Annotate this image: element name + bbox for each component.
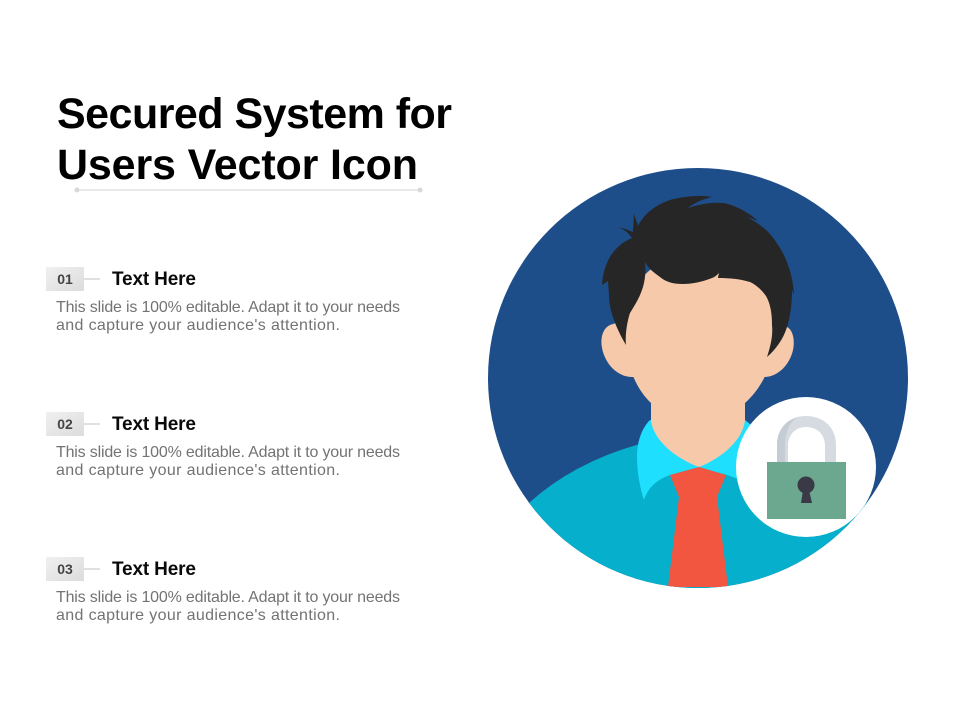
description 01 [56, 299, 400, 334]
description 03 [56, 589, 400, 624]
title: Users Vector Icon [57, 141, 418, 189]
connector 03 [84, 568, 100, 570]
number badge 02 [46, 412, 84, 436]
description 02: This slide is 100% editable. Adapt it to your needs [56, 444, 400, 461]
description 01: This slide is 100% editable. Adapt it to your needs [56, 299, 400, 316]
number badge 03: 03 [57, 561, 73, 577]
heading 01: Text Here [112, 269, 196, 290]
shackle [777, 416, 836, 463]
ears [601, 320, 794, 377]
title divider [74, 188, 422, 192]
shirt [530, 444, 867, 588]
lock body [767, 462, 846, 519]
connector 02 [84, 423, 100, 425]
tie [668, 467, 728, 587]
heading 03: Text Here [112, 559, 196, 580]
keyhole [798, 476, 814, 503]
list item 01 [46, 267, 400, 334]
number badge 01: 01 [57, 271, 73, 287]
list item 03 [46, 557, 400, 624]
icon: user with padlock [488, 168, 908, 600]
background circle [488, 168, 908, 588]
number badge 01 [46, 267, 84, 291]
description 03: This slide is 100% editable. Adapt it to your needs [56, 589, 400, 606]
connector 01 [84, 278, 100, 280]
padlock [767, 416, 846, 519]
title: Secured System for [57, 90, 452, 138]
description 02 [56, 444, 400, 479]
number badge 03 [46, 557, 84, 581]
hair [602, 196, 794, 357]
list item 02 [46, 412, 400, 479]
title [57, 90, 452, 189]
number badge 02: 02 [57, 416, 73, 432]
neck and face [625, 255, 775, 467]
collar [637, 420, 770, 500]
description 03: and capture your audience's attention. [56, 607, 340, 624]
lock badge circle [736, 397, 876, 537]
description 01: and capture your audience's attention. [56, 317, 340, 334]
description 02: and capture your audience's attention. [56, 462, 340, 479]
heading 02: Text Here [112, 414, 196, 435]
